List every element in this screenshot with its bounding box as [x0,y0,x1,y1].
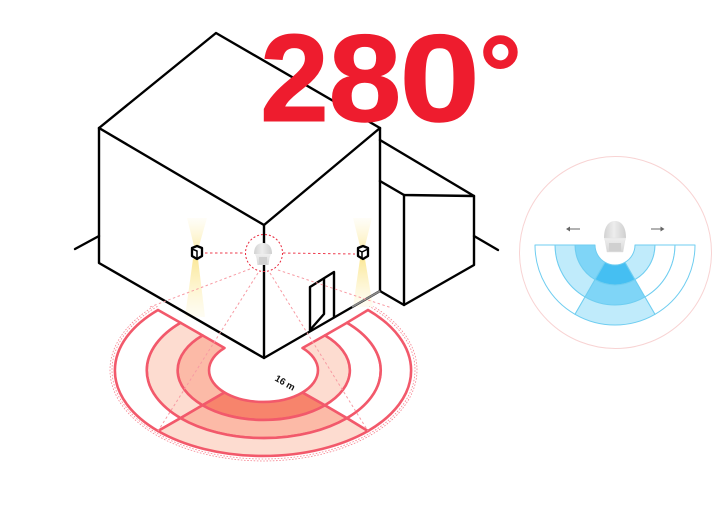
detection zones on floor [115,310,411,456]
dotted outer range ellipse [110,306,417,461]
right light fixture [358,246,368,259]
yellow light beams [185,218,373,317]
ground lines [75,236,99,249]
left arrow [566,226,580,232]
main volume [99,33,380,225]
title 280 degrees [260,9,522,148]
dotted sensor circle [246,234,282,272]
title 280 degrees: 8 [328,9,402,148]
door [310,272,334,330]
sensor bulb [254,243,272,265]
range label: 16 m [273,373,297,394]
title 280 degrees: ° [479,13,522,133]
annex volume [380,140,474,305]
dashed sensor connections [150,253,392,431]
title 280 degrees: 0 [399,9,480,148]
right arrow [651,226,664,232]
title 280 degrees: 2 [260,10,329,148]
side view bulb [604,221,626,252]
right sector bands [302,310,411,431]
side view fan [535,245,695,325]
wall highlight [352,291,380,307]
house outline [75,33,498,358]
side view panel [520,156,712,348]
left light fixture [192,246,202,259]
bottom sector bands [158,392,368,456]
panel circle [520,156,712,348]
left sector bands [115,310,224,431]
